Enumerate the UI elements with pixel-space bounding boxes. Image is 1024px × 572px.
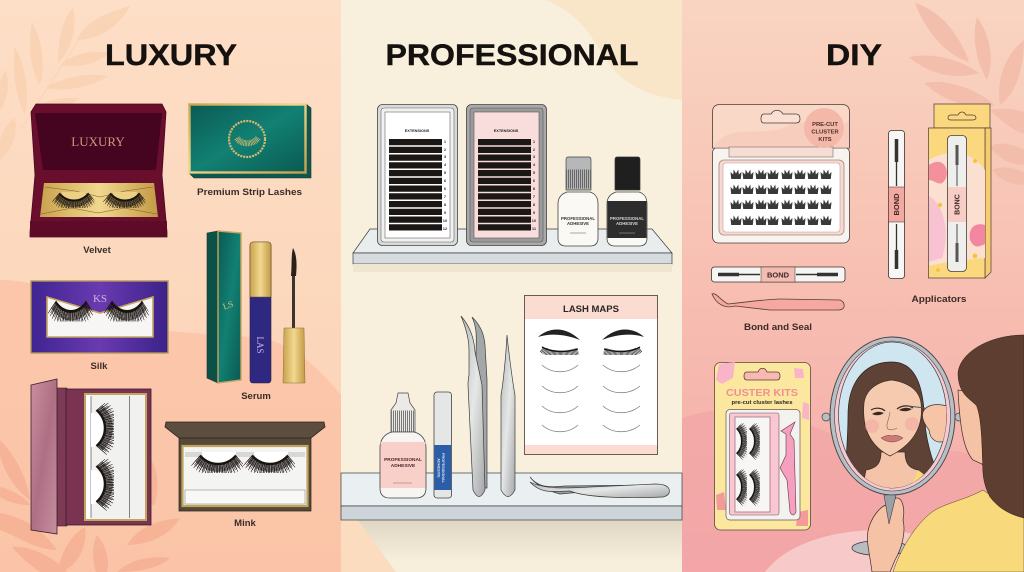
product: silk box [31,281,168,353]
upper shelf [353,229,672,272]
mascara tube [250,242,271,383]
bottle label: PROFESSIONAL [384,458,422,463]
leaves: top right [909,3,1024,185]
badge [804,108,844,148]
row numbers: 6 [533,178,536,183]
reflection: woman applying lashes [846,362,947,490]
product: velvet box [30,104,167,237]
bottle label: PROFESSIONAL [561,216,595,221]
row numbers: 3 [444,154,447,159]
row numbers: 9 [444,210,447,215]
product: serum set [207,231,305,383]
row numbers: 10 [532,218,537,223]
face edge [958,390,986,470]
box lid label: LUXURY [71,134,125,149]
lower shelf [341,473,682,520]
brows and eyes [538,329,644,354]
tweezers: straight vertical [501,335,515,496]
pink tweezers [780,422,796,515]
badge: PRE-CUT [812,122,838,128]
lash pair [196,452,292,471]
lash map chart [524,296,658,454]
hang hole [744,368,780,380]
applicator label: BOND [892,193,901,216]
label: serum: Serum [241,391,271,402]
lash pair [91,406,112,506]
panel: DIY background [682,0,1024,572]
lash pair [56,192,143,207]
row numbers [443,139,448,231]
title: DIY: DIY [826,39,882,72]
row numbers: 9 [533,210,536,215]
row numbers: 3 [533,154,536,159]
applicator label: BOND [767,270,790,280]
product: cluster kits card [714,362,810,530]
title: professional: PROFESSIONAL [386,39,638,72]
row numbers: 8 [533,202,536,207]
row numbers: 12 [443,226,448,231]
bottle label: PROFESSIONAL [610,216,644,221]
tweezers: curved vertical [461,316,487,496]
row numbers: 6 [444,186,447,191]
product: applicator box [928,104,991,278]
panel: professional background [341,0,682,572]
row numbers: 2 [533,147,536,152]
guide arcs [542,365,640,432]
adhesive bottle: black [607,157,647,246]
long brown hair [958,335,1024,518]
lash tray: pink [466,104,546,246]
bottle label: ADHESIVE [567,221,589,226]
lash tray: white [378,104,458,246]
monogram: KS [93,293,107,305]
badge: KITS [818,137,832,143]
adhesive bottle: pink label [380,393,426,498]
badge: CLUSTER [811,130,840,136]
row numbers: 6 [444,178,447,183]
label: silk: Silk [91,361,108,372]
tray heading: EXTENSIONS [405,129,430,133]
card subheading: pre-cut cluster lashes [732,400,792,406]
hand holding mirror [867,498,904,572]
product: open mauve box [31,379,151,534]
window label: BONC [954,194,962,215]
mirror with reflection [822,337,963,495]
tray heading: EXTENSIONS [494,129,519,133]
gold lash emblem [229,121,265,157]
woman seen from behind [867,335,1024,572]
row numbers: 1 [533,139,536,144]
lash rows [478,139,531,232]
label: velvet: Velvet [83,245,112,256]
hang hole [761,110,800,123]
row numbers: 11 [532,226,537,231]
row numbers: 2 [444,147,447,152]
adhesive bottle: white [558,157,598,246]
map heading: LASH MAPS [563,304,619,315]
label: premium strip lashes: Premium Strip Lashes [197,187,302,198]
row numbers: 10 [443,218,448,223]
lash pair [52,302,146,320]
panel: luxury background [0,0,341,572]
row numbers: 5 [444,170,447,175]
row numbers: 7 [533,194,536,199]
lash sets [737,425,759,503]
product: bond applicator horizontal [712,267,845,282]
tweezers: flat horizontal [530,477,669,498]
mirror handle over hand [884,495,896,524]
mascara wand [283,248,305,383]
leaves: bottom left [0,440,180,572]
bottle label: ADHESIVE [391,463,416,469]
row numbers: 8 [444,202,447,207]
row numbers [532,139,537,231]
row numbers: 4 [533,162,536,167]
tube label: PROFESSIONAL [441,453,445,483]
mascara tube: LAS [255,336,265,354]
product: premium strip lashes box [189,104,311,178]
tube label: ADHESIVE [436,458,440,478]
label: bond and seal: Bond and Seal [744,322,812,333]
row numbers: 5 [533,170,536,175]
label: applicators: Applicators [912,294,966,305]
lash clusters [730,170,832,225]
row numbers: 4 [444,162,447,167]
row numbers: 1 [444,139,447,144]
adhesive tube: blue label [434,392,452,498]
label: mink: Mink [234,518,257,529]
product: bond applicator vertical [888,130,904,278]
product: pre-cut cluster kit [712,104,850,243]
leaves: top left [0,6,130,160]
product: mink box [165,422,325,511]
mirror stand [852,540,908,556]
row numbers: 8 [533,186,536,191]
card heading: CUSTER KITS [726,388,798,399]
tweezers: pink [712,294,844,310]
lash rows [389,139,442,232]
bottle label: ADHESIVE [616,221,638,226]
title: luxury: LUXURY [105,39,237,72]
yellow shirt [893,490,1024,572]
row numbers: 7 [444,194,447,199]
serum box: LS [221,299,235,312]
serum box [207,231,241,383]
